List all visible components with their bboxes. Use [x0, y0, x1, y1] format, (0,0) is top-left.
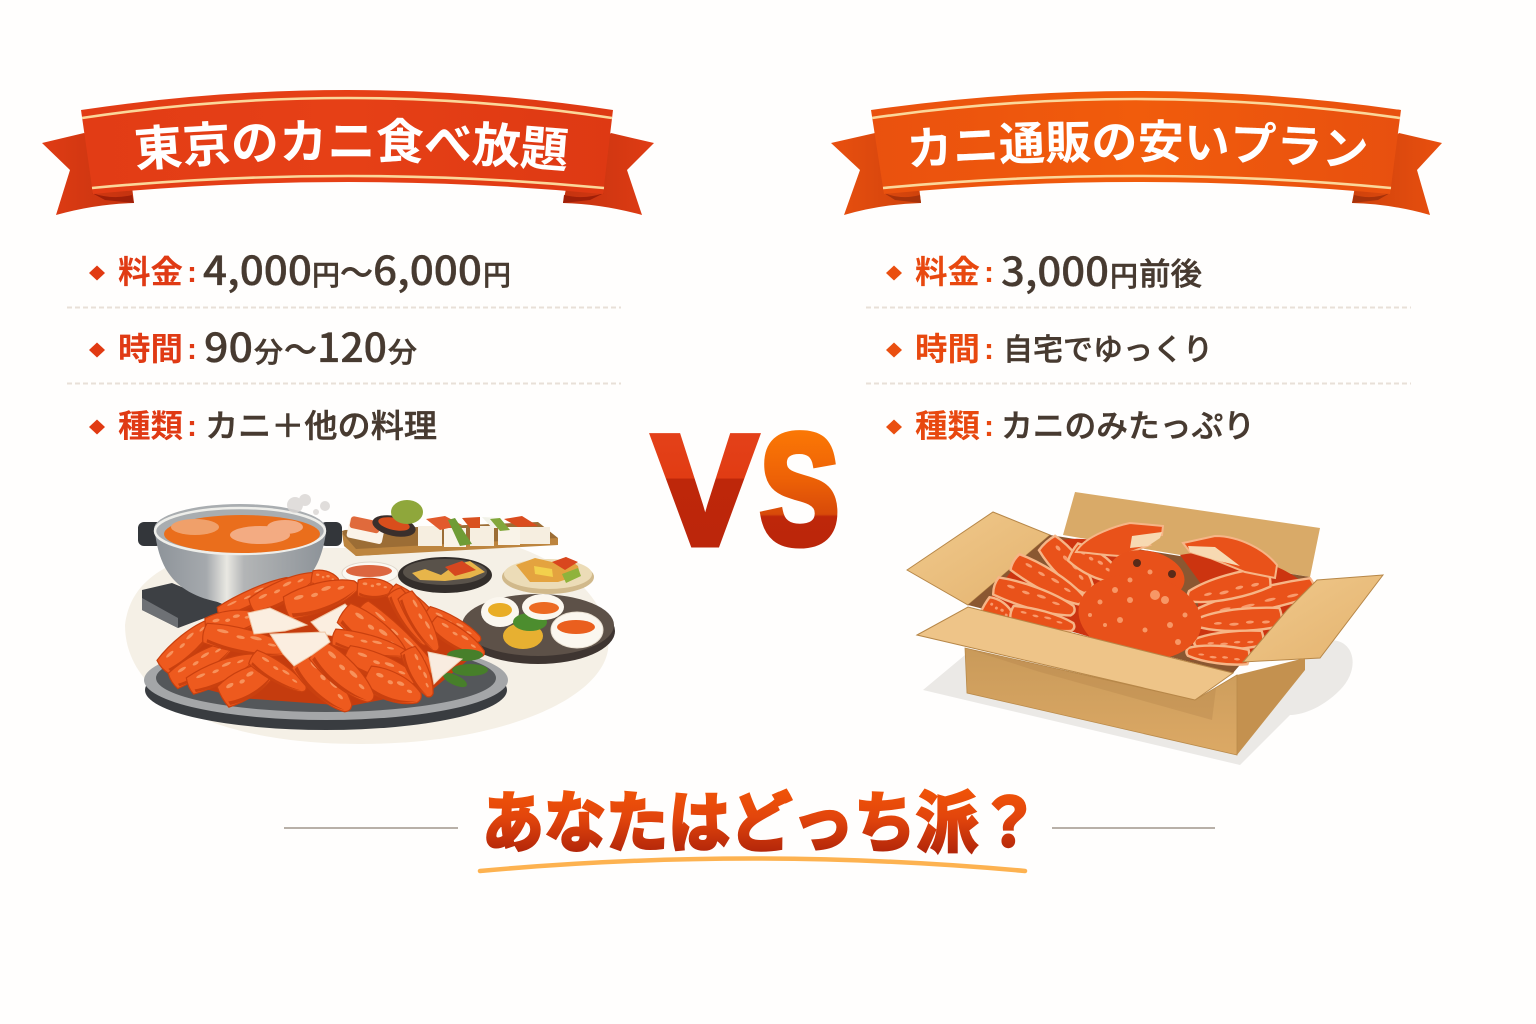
row: price left: ～ — [340, 248, 373, 294]
row: price left: 円 — [312, 254, 340, 294]
row: type right — [886, 401, 1255, 447]
illustration: delivery box with whole crab — [907, 492, 1383, 765]
underline swoosh — [480, 858, 1025, 871]
row: time left: 分 — [254, 331, 283, 371]
row: time right: : — [984, 333, 994, 366]
row: price left: 4,000 — [203, 239, 312, 297]
crab meat right — [428, 652, 462, 684]
bottom question heading — [284, 786, 1215, 871]
box front side — [965, 648, 1237, 755]
row: type right: カニのみたっぷり — [1001, 401, 1255, 447]
row: price right: 3,000 — [1001, 240, 1109, 298]
row: price right: 料金 — [915, 254, 980, 290]
right spec list — [866, 240, 1411, 447]
crab carapace — [1105, 544, 1189, 606]
row: price left: 料金 — [118, 254, 183, 290]
row: price left: 円 — [483, 254, 511, 294]
hot pot — [138, 494, 342, 605]
row: time left: ～ — [284, 325, 317, 371]
row: price right — [886, 240, 1202, 298]
crab meat left — [248, 608, 307, 634]
table mat — [125, 548, 608, 744]
question text: あなたはどっち派？ — [482, 786, 1040, 860]
box right side — [1237, 658, 1305, 755]
crab claw right — [1183, 536, 1277, 578]
VS emblem: V — [653, 404, 757, 578]
VS emblem — [653, 403, 839, 578]
row: time left: 時間 — [118, 331, 183, 367]
crab meat front — [270, 632, 330, 666]
dark plate with vegetables — [398, 557, 492, 593]
row: price right: : — [984, 256, 994, 289]
row: price left: 6,000 — [373, 239, 482, 297]
burner — [142, 583, 226, 628]
row: type left: : — [187, 410, 197, 443]
beige plate with vegetables — [502, 560, 594, 594]
wooden plate with rice and sauces — [461, 594, 615, 664]
row: type right: : — [984, 410, 994, 443]
row: time left: 分 — [388, 331, 417, 371]
small sauce dish — [342, 562, 398, 584]
row: price left: : — [187, 256, 197, 289]
steam — [287, 494, 330, 515]
VS emblem: S — [760, 403, 839, 577]
row: type left: 種類 — [118, 408, 183, 444]
ground shadow — [923, 640, 1353, 765]
box inner — [968, 535, 1310, 673]
row: time right: 自宅でゆっくり — [1003, 325, 1213, 369]
left flap — [907, 512, 1050, 605]
left banner heading text: 東京のカニ食べ放題 — [136, 118, 568, 171]
row: time right: 時間 — [915, 331, 980, 367]
crab meat center — [311, 604, 355, 637]
row: price right: 円 — [1110, 255, 1138, 295]
front flap — [917, 607, 1233, 700]
row: type left — [89, 401, 437, 447]
left spec list — [67, 239, 621, 447]
row: price left — [89, 239, 511, 297]
crab claw left — [1076, 523, 1163, 556]
left ribbon banner: 東京のカニ食べ放題 — [42, 90, 654, 215]
row: price right: 前後 — [1139, 249, 1202, 294]
row: type right: 種類 — [915, 408, 980, 444]
row: time left — [89, 316, 417, 374]
pile of crab legs — [154, 565, 489, 720]
row: time left: : — [187, 333, 197, 366]
illustration: crab all-you-can-eat spread — [125, 494, 615, 744]
back flap — [1063, 492, 1320, 577]
row: time left: 120 — [317, 316, 387, 374]
right flap — [1243, 575, 1383, 662]
serving platter — [144, 640, 508, 730]
right ribbon banner: カニ通販の安いプラン — [831, 91, 1442, 215]
sushi tray — [342, 500, 558, 556]
crab — [979, 523, 1317, 669]
right banner heading text: カニ通販の安いプラン — [911, 119, 1366, 168]
row: type left: カニ＋他の料理 — [205, 401, 437, 447]
row: time right — [886, 325, 1213, 369]
garnish greens — [441, 649, 488, 690]
row: time left: 90 — [204, 316, 253, 374]
